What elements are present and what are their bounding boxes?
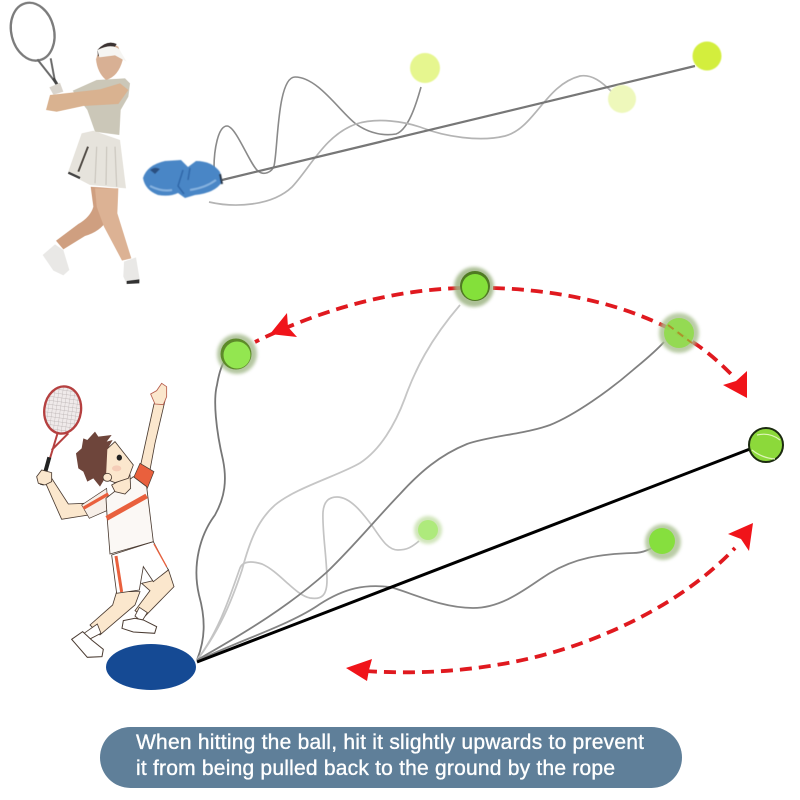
rope: bottom top ball — [197, 305, 460, 660]
neck — [112, 475, 131, 494]
icon: blue rebound base — [143, 160, 222, 198]
caption text: it from being pulled back to the ground by the rope — [136, 757, 615, 780]
front leg — [135, 569, 174, 617]
icon: racket — [5, 0, 60, 89]
rope: top loose curve one — [214, 77, 421, 173]
skirt — [68, 131, 126, 188]
ball: bottom faded middle — [414, 516, 442, 544]
caption text: When hitting the ball, hit it slightly upwards to prevent — [136, 731, 644, 754]
head — [96, 45, 123, 80]
rope: bottom to lower right ball — [197, 543, 660, 661]
eye — [117, 455, 122, 461]
ear — [103, 473, 112, 481]
back leg — [90, 592, 140, 635]
shirt sleeve left — [82, 488, 108, 518]
illustration: boy serving — [37, 383, 174, 657]
rope: bottom left ball — [196, 362, 225, 660]
arrow: top left red dashed — [255, 288, 460, 342]
ground disc — [106, 644, 196, 690]
legs — [56, 187, 131, 261]
rope: top taut line — [222, 66, 695, 180]
ball: top faded right — [608, 85, 636, 113]
shirt body — [106, 477, 153, 554]
cheek — [112, 465, 121, 471]
rope: top loose curve two — [209, 76, 612, 205]
face — [104, 442, 133, 483]
ball: bottom taut end — [749, 428, 783, 462]
rope: bottom wavy light — [197, 497, 419, 660]
shoes — [43, 244, 140, 284]
hair — [76, 432, 113, 487]
ball: top taut end — [692, 42, 722, 70]
shorts — [112, 542, 168, 593]
photo: woman tennis player swinging racket — [5, 0, 140, 284]
shoe left — [72, 632, 103, 657]
arrow: bottom two-way red dashed — [346, 523, 753, 681]
rope: bottom taut black line — [197, 449, 750, 662]
ball: bottom left — [217, 334, 257, 374]
arms — [46, 83, 128, 112]
rope: bottom to upper right ball — [197, 342, 664, 660]
hand on racket — [37, 470, 52, 485]
raised arm — [141, 401, 165, 470]
racket — [41, 384, 84, 485]
left arm — [45, 478, 88, 519]
torso — [73, 78, 130, 135]
arrow: top right red dashed — [493, 288, 747, 398]
ball: top faded left — [410, 53, 440, 83]
ball: bottom top — [454, 267, 494, 307]
shoe right — [122, 618, 157, 633]
raised hand — [151, 383, 167, 405]
caption pill — [100, 727, 682, 788]
ball: bottom lower right — [645, 524, 681, 560]
socks — [84, 607, 147, 639]
shirt sleeve right — [133, 463, 154, 488]
ball: bottom upper right — [659, 313, 699, 353]
